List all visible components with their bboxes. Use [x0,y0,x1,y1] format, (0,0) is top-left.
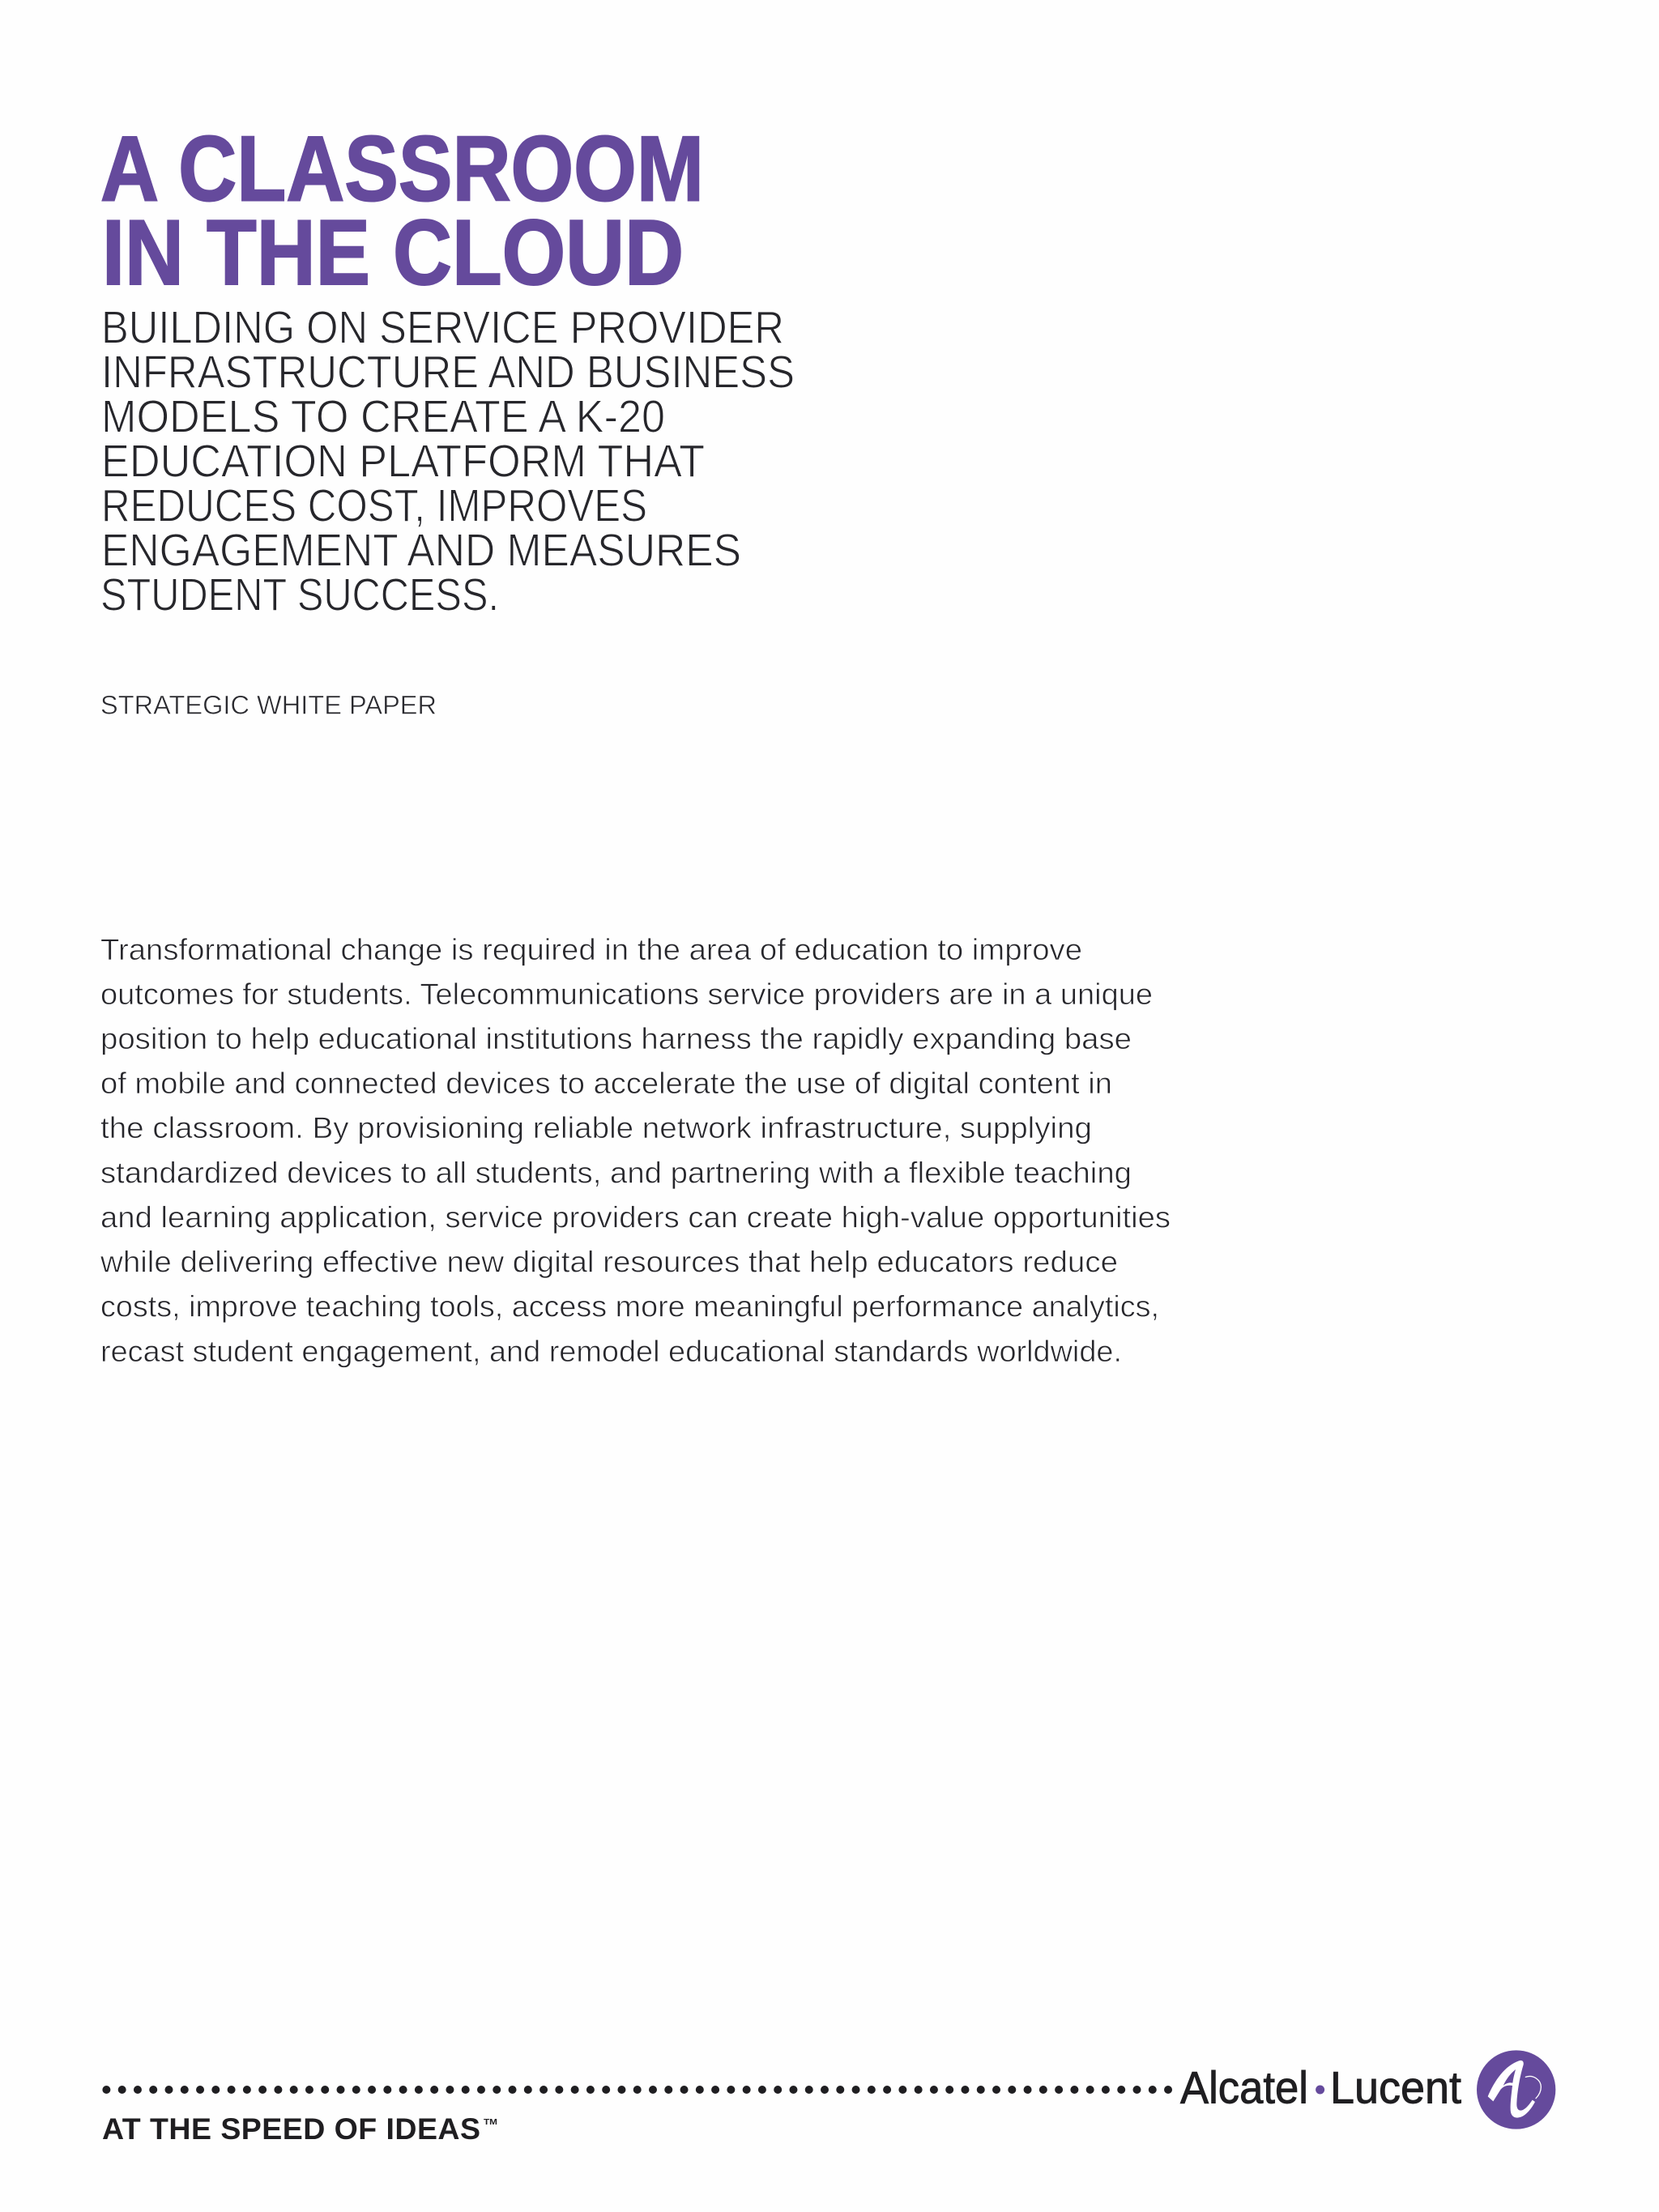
icon: Alcatel-Lucent logo mark [1477,2050,1555,2129]
body paragraph: standardized devices to all students, and partnering with a flexible teaching [100,1157,1132,1189]
title [100,118,704,305]
body paragraph [100,933,1171,1368]
subtitle: MODELS TO CREATE A K-20 [101,390,665,442]
body paragraph: costs, improve teaching tools, access more meaningful performance analytics, [100,1289,1159,1323]
logo wordmark: Alcatel [1180,2062,1308,2112]
body paragraph: Transformational change is required in the area of education to improve [100,933,1082,966]
subtitle: STUDENT SUCCESS. [100,569,499,620]
subtitle: BUILDING ON SERVICE PROVIDER [101,301,784,353]
body paragraph: outcomes for students. Telecommunications service providers are in a unique [100,978,1153,1011]
subtitle: REDUCES COST, IMPROVES [101,479,647,531]
footer dotted line [106,2086,1169,2094]
tagline: TM [484,2117,497,2127]
subtitle [100,301,795,620]
document type label: STRATEGIC WHITE PAPER [100,690,437,719]
logo wordmark [1180,2062,1461,2112]
subtitle: EDUCATION PLATFORM THAT [101,436,705,486]
body paragraph: recast student engagement, and remodel educational standards worldwide. [100,1335,1122,1368]
subtitle: INFRASTRUCTURE AND BUSINESS [101,347,795,397]
body paragraph: while delivering effective new digital resources that help educators reduce [100,1246,1118,1278]
body paragraph: of mobile and connected devices to accelerate the use of digital content in [100,1067,1112,1100]
tagline: AT THE SPEED OF IDEAS [102,2112,480,2146]
body paragraph: the classroom. By provisioning reliable network infrastructure, supplying [100,1111,1092,1144]
title: A CLASSROOM [100,118,704,220]
body paragraph: and learning application, service providers can create high-value opportunities [100,1200,1171,1234]
subtitle: ENGAGEMENT AND MEASURES [101,525,741,575]
body paragraph: position to help educational institutions harness the rapidly expanding base [100,1022,1132,1055]
title: IN THE CLOUD [102,202,684,305]
logo wordmark: Lucent [1330,2062,1461,2112]
